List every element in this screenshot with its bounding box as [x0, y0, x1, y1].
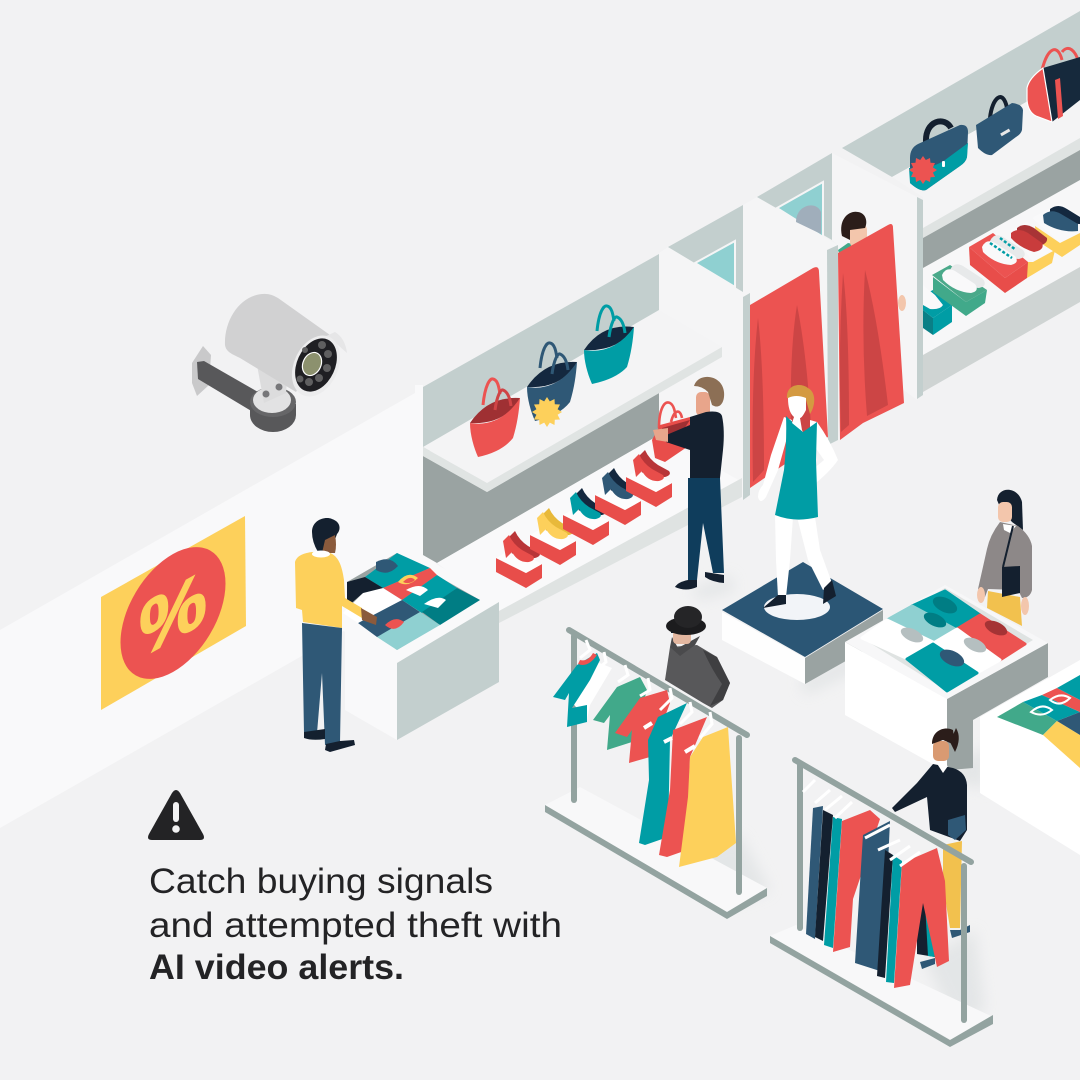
man in hat and dark coat behind rack [665, 606, 730, 708]
woman with black bag [977, 490, 1032, 626]
sneaker and loafer boxes [923, 203, 1080, 335]
caption text: AI video alerts. [149, 948, 404, 987]
hanging t-shirts and dresses [553, 640, 736, 867]
woman shopping at trouser rack [892, 728, 970, 969]
floor shadows [680, 575, 990, 1025]
teal and navy briefcase [909, 121, 968, 190]
fitting room one [668, 197, 838, 500]
woman browsing handbags [652, 377, 724, 590]
fitting room two [757, 153, 917, 445]
caption text: and attempted theft with [149, 906, 562, 945]
shoe boxes with heels [496, 450, 672, 588]
caption text [149, 862, 562, 987]
customer in fitting room [838, 212, 906, 311]
curtain two [838, 224, 904, 440]
clothes rack two with trousers [770, 760, 993, 1047]
bag shelf unit [423, 247, 750, 623]
security camera [192, 294, 349, 432]
sale poster with percent sign [101, 516, 246, 710]
table two with folded shirts [845, 585, 1048, 772]
navy satchel [976, 97, 1023, 155]
navy handbag with yellow tag [527, 343, 577, 427]
mannequin in teal dress [758, 385, 838, 608]
right shelf unit [842, 11, 1080, 399]
teal handbag [584, 306, 634, 384]
caption text: Catch buying signals [149, 862, 493, 901]
man in yellow sweater folding clothes [295, 518, 499, 752]
sale poster with percent sign: % [139, 553, 207, 676]
red and navy duffle bag [1027, 48, 1080, 122]
curtain one [750, 267, 828, 488]
red handbag [470, 379, 520, 457]
clothes rack one [545, 630, 767, 919]
warning icon [148, 790, 204, 840]
white wall band [0, 385, 437, 828]
mannequin platform [722, 562, 883, 684]
table three with folded clothes [980, 660, 1080, 855]
